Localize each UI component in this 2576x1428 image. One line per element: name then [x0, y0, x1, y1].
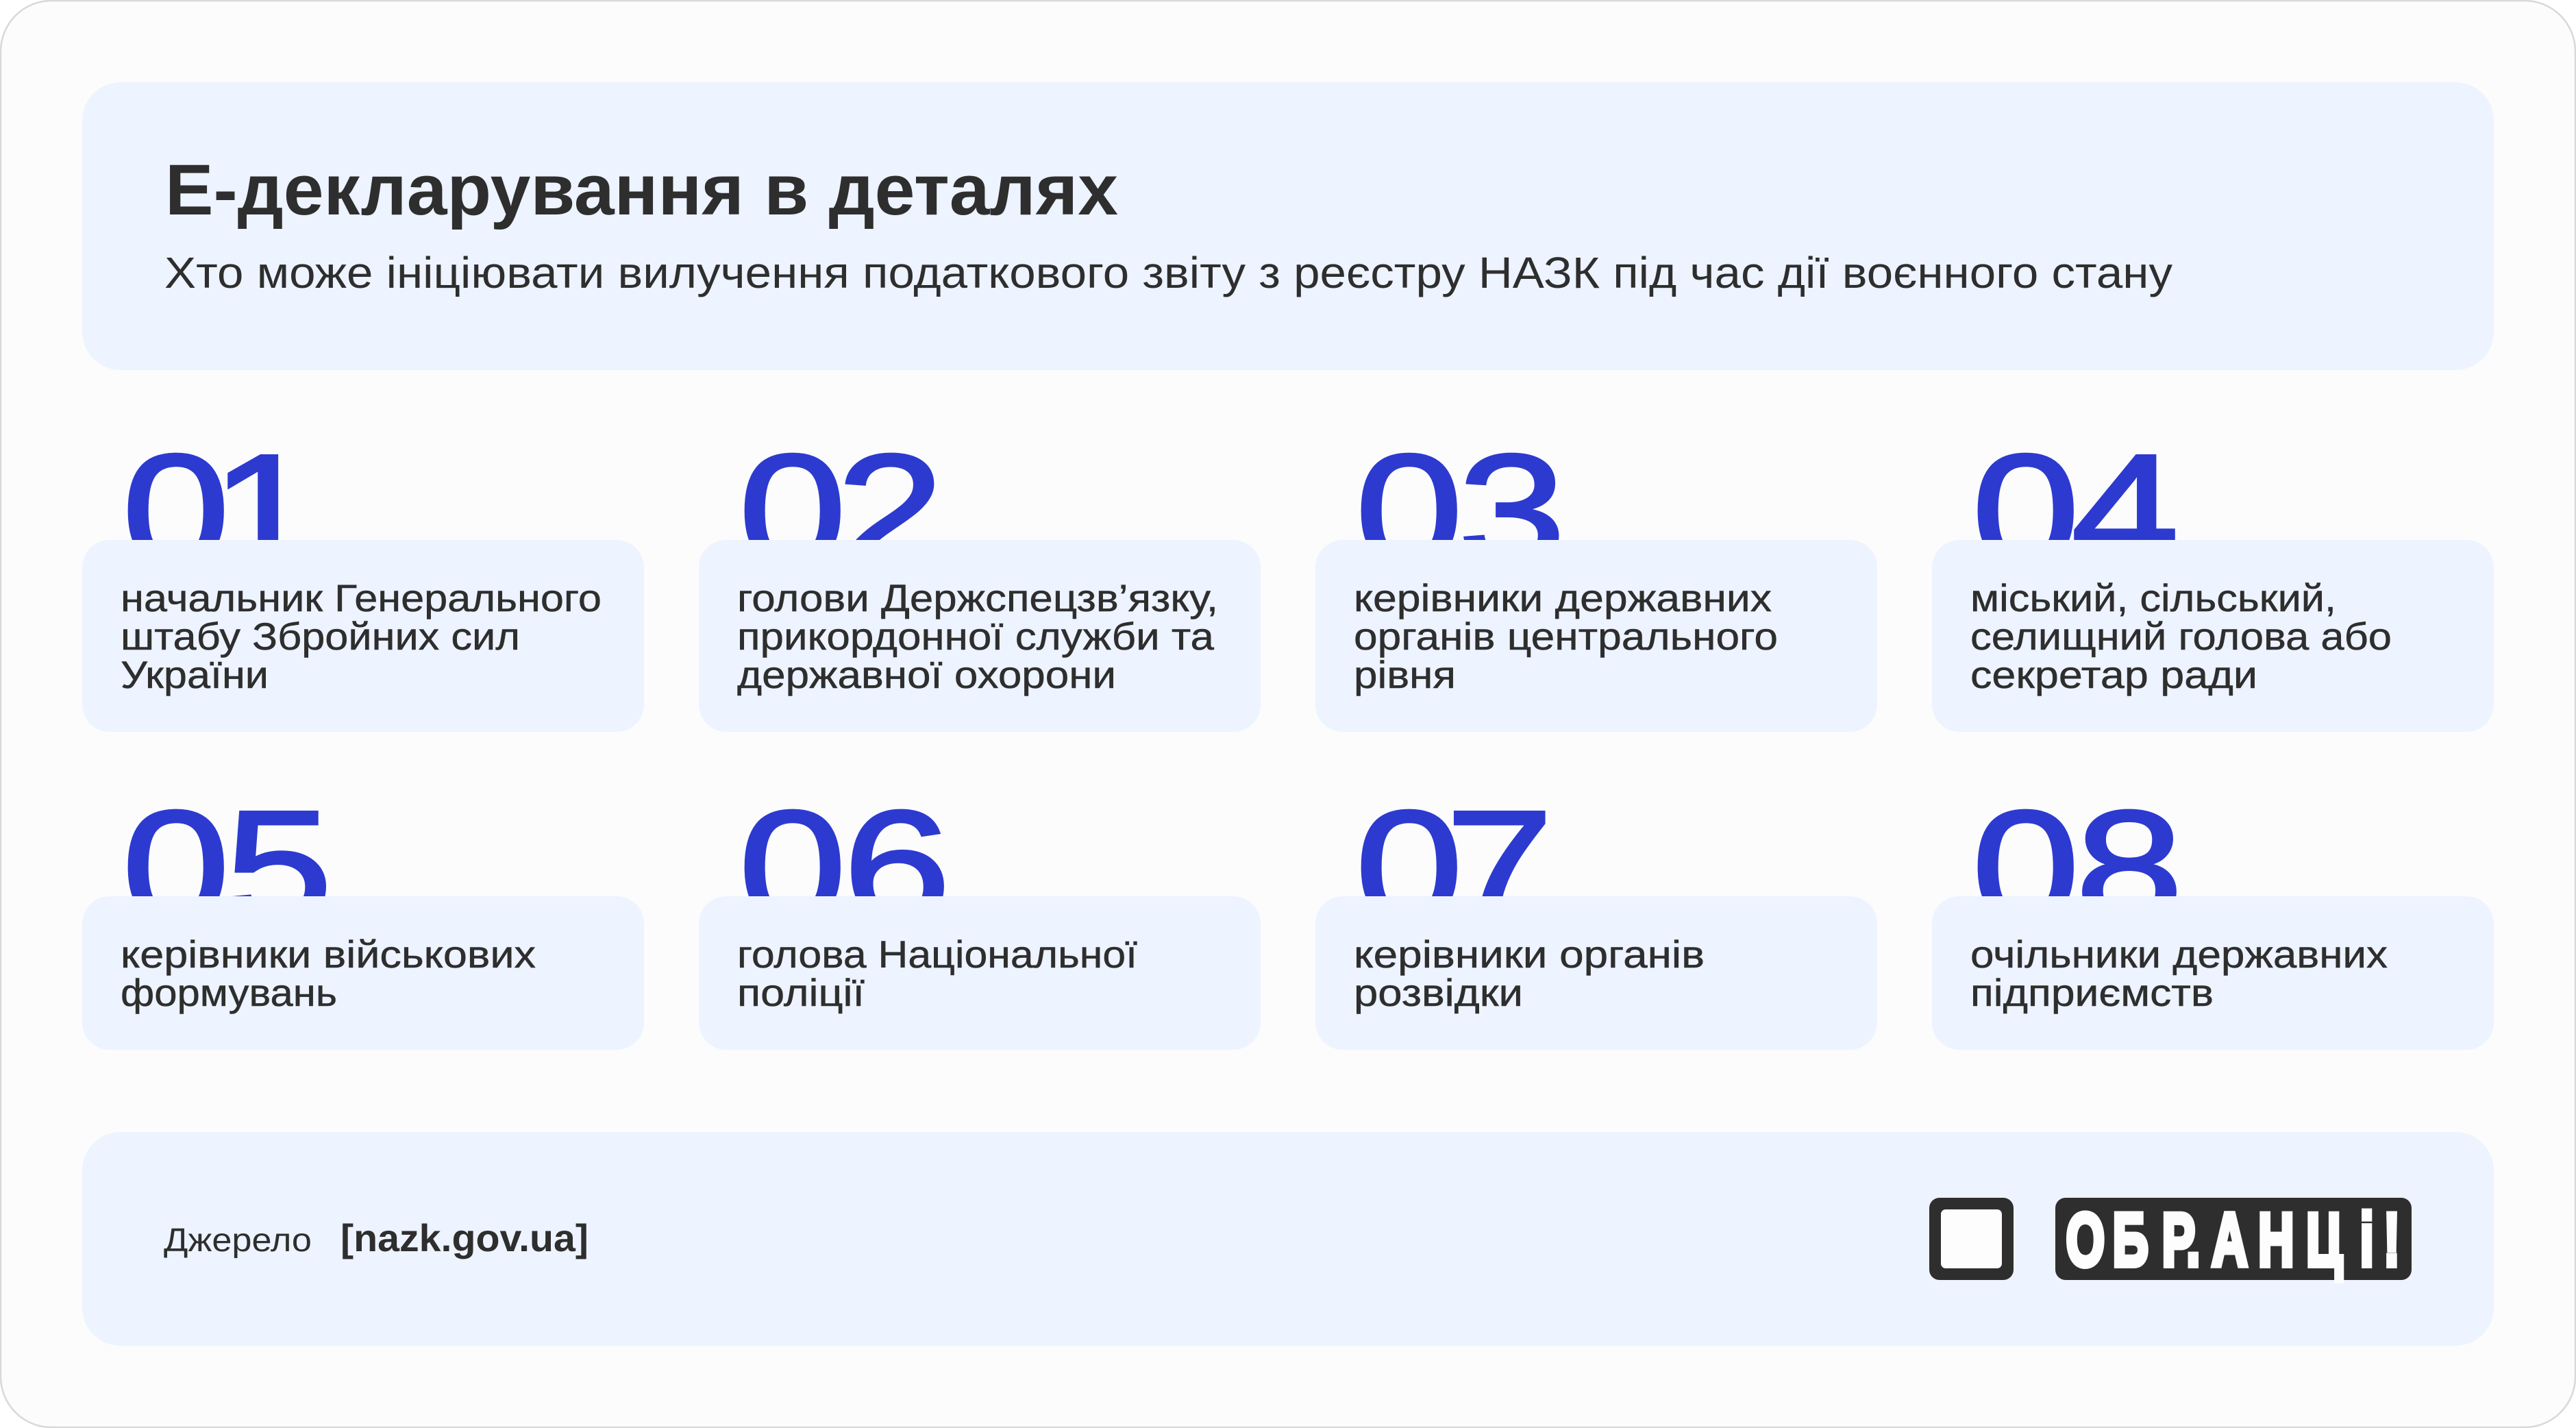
- card text 05: керівники військових: [121, 933, 536, 976]
- card text 01: [121, 576, 602, 696]
- number 03: 03: [1355, 421, 1566, 600]
- item 08: [1932, 778, 2494, 1050]
- card text 03: керівники державних: [1354, 576, 1772, 619]
- card background 02: [699, 540, 1261, 732]
- card background 03: [1315, 540, 1877, 732]
- card text 02: державної охорони: [737, 653, 1116, 696]
- card text 07: розвідки: [1354, 971, 1523, 1014]
- number 06: 06: [739, 778, 951, 957]
- item 02: [699, 421, 1261, 732]
- item 04: [1932, 421, 2494, 732]
- card text 07: керівники органів: [1354, 933, 1705, 976]
- item 03: [1315, 421, 1877, 732]
- card text 08: підприємств: [1970, 971, 2214, 1014]
- card background 01: [82, 540, 644, 732]
- card text 06: голова Національної: [737, 933, 1137, 976]
- subtitle: Хто може ініціювати вилучення податкового звіту з реєстру НАЗК під час дії воєнного стану: [164, 248, 2172, 297]
- card text 08: очільники державних: [1970, 933, 2388, 976]
- card text 06: поліції: [737, 971, 865, 1014]
- title: Е-декларування в деталях: [165, 150, 1118, 230]
- card text 06: [737, 933, 1137, 1014]
- card background 07: [1315, 896, 1877, 1050]
- footer background: [82, 1132, 2494, 1346]
- source label: Джерело: [164, 1222, 312, 1259]
- number 08: 08: [1972, 778, 2183, 957]
- card text 03: рівня: [1354, 653, 1456, 696]
- card background 06: [699, 896, 1261, 1050]
- number 04: 04: [1972, 421, 2179, 600]
- card text 02: прикордонної служби та: [737, 615, 1215, 658]
- header background: [82, 82, 2494, 370]
- card background 04: [1932, 540, 2494, 732]
- card text 02: [737, 576, 1218, 696]
- item 06: [699, 778, 1261, 1050]
- card text 05: формувань: [121, 971, 337, 1014]
- card text 04: селищний голова або: [1970, 615, 2392, 658]
- number 02: 02: [739, 421, 944, 600]
- card text 07: [1354, 933, 1705, 1014]
- number 07: 07: [1355, 778, 1553, 957]
- item 07: [1315, 778, 1877, 1050]
- card background 05: [82, 896, 644, 1050]
- card text 05: [121, 933, 536, 1014]
- source link: [nazk.gov.ua]: [340, 1216, 589, 1259]
- number 01: 01: [122, 421, 319, 600]
- item 05: [82, 778, 644, 1050]
- card text 04: [1970, 576, 2392, 696]
- card text 02: голови Держспецзв’язку,: [737, 576, 1218, 619]
- card text 01: начальник Генерального: [121, 576, 602, 619]
- logo: wordmark: ОБР.АНЦі!: [2066, 1198, 2400, 1282]
- panel: header: [82, 82, 2494, 370]
- card background 08: [1932, 896, 2494, 1050]
- card text 01: України: [121, 653, 269, 696]
- card text 03: [1354, 576, 1778, 696]
- number 05: 05: [122, 778, 333, 957]
- card text 01: штабу Збройних сил: [121, 615, 520, 658]
- item 01: [82, 421, 644, 732]
- panel: footer: [82, 1132, 2494, 1346]
- card text 04: міський, сільський,: [1970, 576, 2336, 619]
- card text 08: [1970, 933, 2388, 1014]
- logo: square mark: [1929, 1198, 2014, 1280]
- card text 03: органів центрального: [1354, 615, 1778, 658]
- card text 04: секретар ради: [1970, 653, 2257, 696]
